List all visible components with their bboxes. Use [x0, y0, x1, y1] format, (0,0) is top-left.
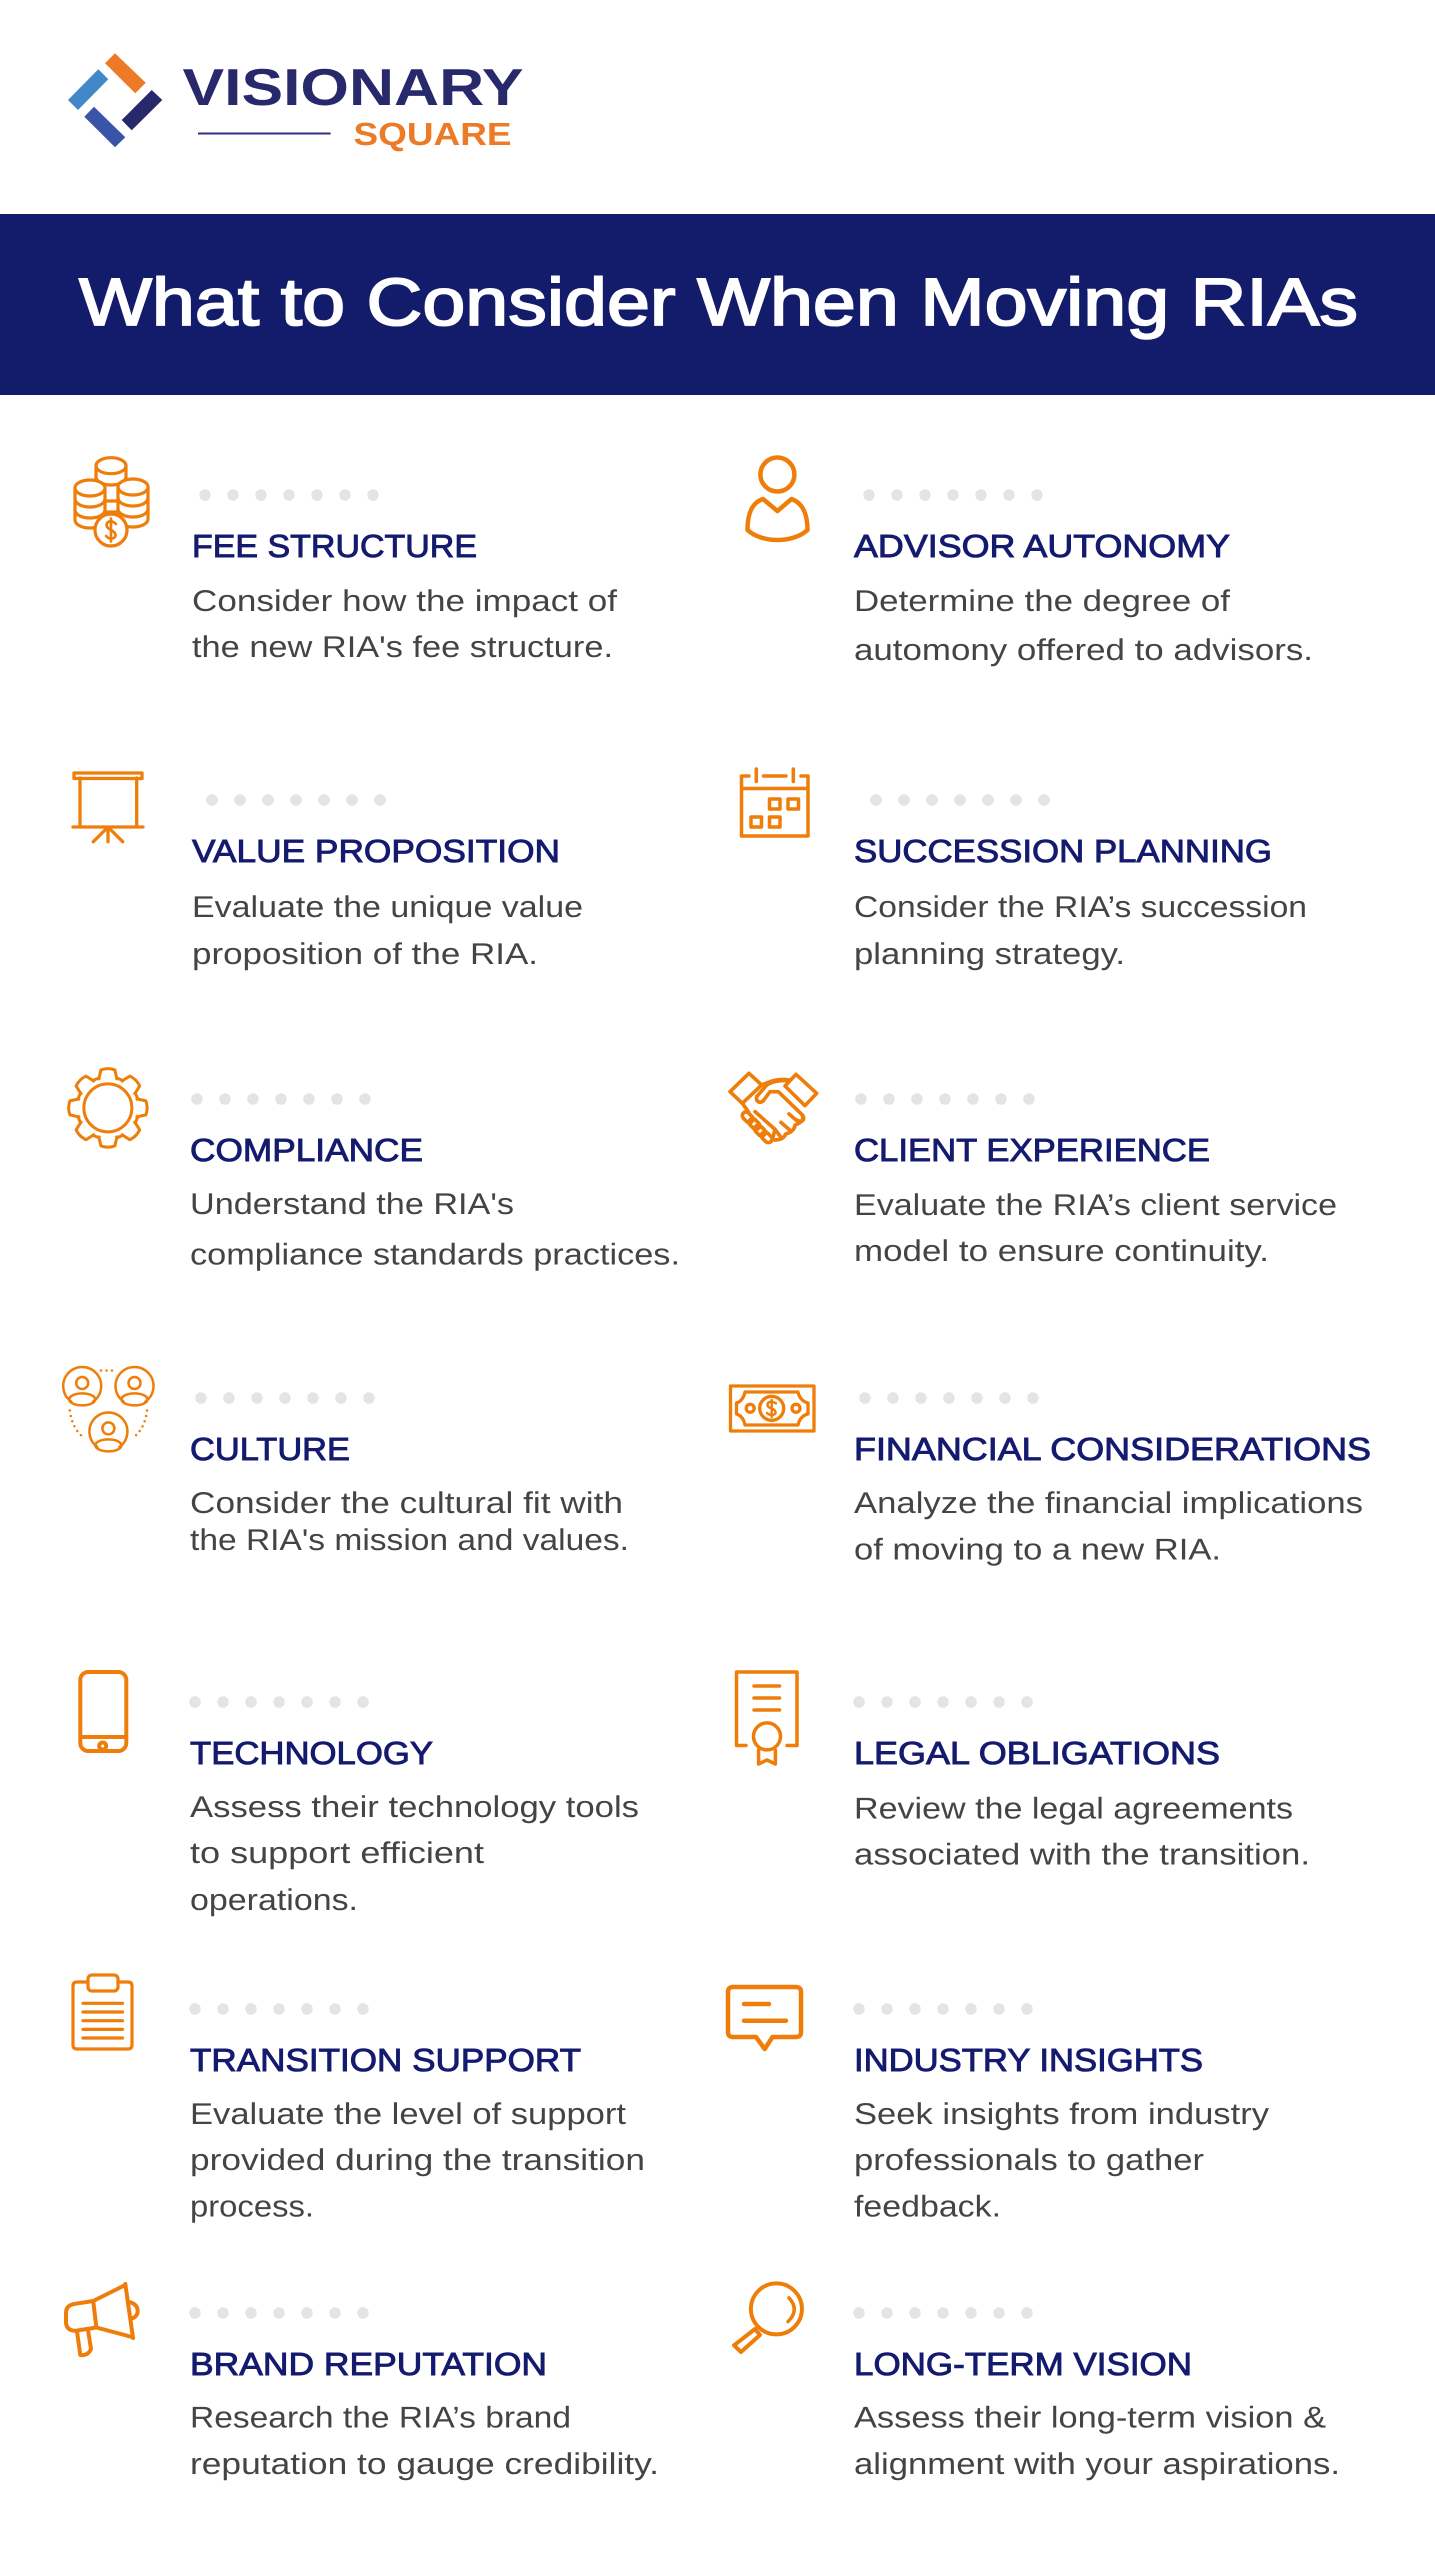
dots — [197, 1093, 366, 1105]
body text: planning strategy. — [854, 938, 1125, 971]
logo mark: diamond of four bars — [68, 53, 162, 147]
body text — [190, 1791, 639, 1917]
body text: Consider how the impact of — [192, 585, 618, 618]
body text: Review the legal agreements — [854, 1792, 1293, 1826]
icon: banknote — [730, 1386, 814, 1431]
heading: FINANCIAL CONSIDERATIONS — [854, 1431, 1371, 1467]
item: technology — [80, 1672, 639, 1917]
dots — [859, 1696, 1028, 1708]
heading: CLIENT EXPERIENCE — [854, 1132, 1210, 1168]
heading: CULTURE — [190, 1431, 350, 1467]
dots — [859, 2307, 1028, 2319]
body text: Determine the degree of — [854, 585, 1231, 618]
body text: the RIA's mission and values. — [190, 1524, 629, 1557]
title banner — [0, 214, 1435, 395]
body text: Consider the RIA’s succession — [854, 891, 1307, 924]
body text: professionals to gather — [854, 2144, 1204, 2177]
icon: person — [748, 458, 808, 540]
icon: certificate — [736, 1672, 797, 1764]
dots — [212, 794, 381, 806]
body text — [190, 1188, 680, 1272]
heading: LEGAL OBLIGATIONS — [854, 1735, 1220, 1771]
heading: TRANSITION SUPPORT — [190, 2042, 581, 2078]
item: succession planning — [742, 769, 1307, 971]
heading: INDUSTRY INSIGHTS — [854, 2042, 1203, 2078]
item: long-term vision — [734, 2283, 1340, 2481]
item: advisor autonomy — [748, 458, 1313, 667]
dots — [201, 1392, 370, 1404]
logo rule — [198, 132, 331, 134]
body text: Assess their technology tools — [190, 1791, 639, 1824]
body text — [190, 2098, 645, 2224]
heading: LONG-TERM VISION — [854, 2346, 1192, 2382]
body text: compliance standards practices. — [190, 1238, 680, 1272]
body text: Evaluate the unique value — [192, 891, 583, 924]
item: brand reputation — [66, 2284, 659, 2481]
body text: alignment with your aspirations. — [854, 2448, 1340, 2481]
icon: magnifying glass — [734, 2283, 802, 2352]
icon: handshake — [730, 1073, 817, 1144]
body text: Evaluate the RIA’s client service — [854, 1189, 1337, 1222]
body text: Understand the RIA's — [190, 1188, 514, 1221]
icon: calendar — [742, 769, 808, 836]
body text — [192, 585, 618, 664]
item: client experience — [730, 1073, 1337, 1268]
dots — [859, 2003, 1028, 2015]
body text — [192, 891, 583, 971]
body text — [854, 2402, 1340, 2481]
body text — [190, 1487, 629, 1557]
body text: Analyze the financial implications — [854, 1487, 1363, 1520]
body text: operations. — [190, 1884, 358, 1917]
heading: VALUE PROPOSITION — [192, 833, 560, 869]
icon: three people network — [63, 1367, 154, 1451]
icon: presentation screen — [73, 773, 143, 842]
body text — [854, 585, 1313, 667]
body text: feedback. — [854, 2190, 1001, 2224]
dots — [869, 489, 1038, 501]
item: financial considerations — [730, 1386, 1371, 1566]
item: culture — [63, 1367, 629, 1557]
body text: Consider the cultural fit with — [190, 1487, 623, 1520]
body text: proposition of the RIA. — [192, 938, 538, 971]
body text: Assess their long-term vision & — [854, 2402, 1326, 2434]
item: value proposition — [73, 773, 583, 971]
title: What to Consider When Moving RIAs — [79, 265, 1358, 340]
body text: associated with the transition. — [854, 1838, 1310, 1872]
logo wordmark: SQUARE: SQUARE — [354, 116, 512, 152]
body text — [854, 891, 1307, 971]
body text: reputation to gauge credibility. — [190, 2448, 659, 2481]
item: industry insights — [728, 1987, 1269, 2224]
item: legal obligations — [736, 1672, 1310, 1872]
dots — [861, 1093, 1030, 1105]
body text — [854, 1792, 1310, 1872]
body text — [854, 1487, 1363, 1566]
heading: SUCCESSION PLANNING — [854, 833, 1272, 869]
body text: to support efficient — [190, 1837, 485, 1870]
dots — [195, 1696, 364, 1708]
item: fee structure — [75, 458, 618, 664]
dots — [205, 489, 374, 501]
logo wordmark: VISIONARY: VISIONARY — [182, 59, 524, 117]
dots — [195, 2307, 364, 2319]
body text: of moving to a new RIA. — [854, 1534, 1221, 1566]
heading: FEE STRUCTURE — [192, 528, 477, 564]
body text — [854, 2098, 1269, 2224]
icon: coin stacks — [75, 458, 148, 546]
logo: Visionary Square — [68, 53, 524, 152]
item: compliance — [69, 1069, 680, 1272]
body text — [854, 1189, 1337, 1268]
heading: BRAND REPUTATION — [190, 2346, 547, 2382]
dots — [865, 1392, 1034, 1404]
body text: the new RIA's fee structure. — [192, 631, 613, 664]
icon: smartphone — [80, 1672, 126, 1751]
icon: megaphone — [66, 2284, 138, 2355]
dots — [876, 794, 1045, 806]
body text: model to ensure continuity. — [854, 1235, 1269, 1268]
body text: process. — [190, 2190, 314, 2224]
body text: Seek insights from industry — [854, 2098, 1269, 2131]
body text: automony offered to advisors. — [854, 634, 1313, 667]
icon: clipboard — [73, 1975, 132, 2049]
heading: COMPLIANCE — [190, 1132, 423, 1168]
icon: gear — [69, 1069, 147, 1147]
icon: speech bubble — [728, 1987, 801, 2049]
heading: TECHNOLOGY — [190, 1735, 433, 1771]
dots — [195, 2003, 364, 2015]
heading: ADVISOR AUTONOMY — [854, 528, 1230, 564]
item: transition support — [73, 1975, 645, 2224]
body text: Research the RIA’s brand — [190, 2402, 571, 2434]
body text — [190, 2402, 659, 2481]
body text: provided during the transition — [190, 2144, 645, 2177]
body text: Evaluate the level of support — [190, 2098, 627, 2131]
